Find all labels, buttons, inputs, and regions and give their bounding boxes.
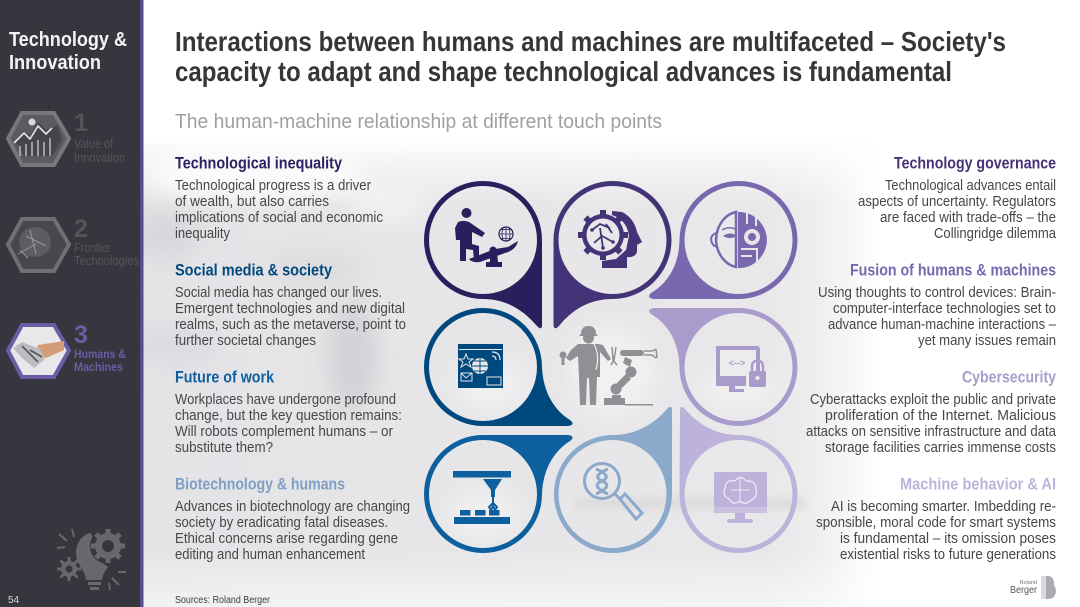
logo: Roland Berger xyxy=(1010,576,1056,599)
page number: 54 xyxy=(8,595,20,606)
icon: monitor with brain xyxy=(714,472,767,523)
text block: technology governance: are faced with trade-offs – the xyxy=(880,209,1056,226)
nav item 2: frontier technologies: Frontier xyxy=(74,240,112,255)
title: capacity to adapt and shape technological advances is fundamental xyxy=(175,56,952,87)
icon: browser window with globe xyxy=(458,344,503,388)
nav item 3: humans and machines (active) xyxy=(8,321,126,377)
text block: future of work: change, but the key question remains: xyxy=(175,407,402,424)
text block: future of work: Will robots complement humans – or xyxy=(175,423,393,440)
text block: machine behavior and AI xyxy=(816,474,1056,563)
text block: technological inequality: of wealth, but also carries xyxy=(175,193,329,210)
sidebar heading: Technology & xyxy=(9,29,127,51)
pin: machine behavior and AI xyxy=(680,407,798,553)
sidebar heading xyxy=(9,29,127,74)
pin: future of work xyxy=(424,435,573,553)
nav item 3: humans and machines (active): Humans & xyxy=(74,347,126,361)
nav item 1: value of innovation xyxy=(8,109,125,165)
text block: fusion of humans and machines: Using thoughts to control devices: Brain- xyxy=(818,284,1056,301)
text block: technological inequality: Technological progress is a driver xyxy=(175,177,371,194)
text block: cybersecurity: proliferation of the Internet. Malicious xyxy=(825,407,1056,424)
nav item 1: value of innovation: 1 xyxy=(74,109,88,137)
pin: technological inequality xyxy=(424,181,542,328)
icon: person on seesaw xyxy=(455,208,518,267)
text block: technology governance: Collingridge dilemma xyxy=(934,225,1057,242)
icon: DNA under magnifier xyxy=(584,464,642,519)
logo: Roland Berger: Berger xyxy=(1010,584,1037,596)
nav item 2: frontier technologies xyxy=(8,215,139,271)
nav item 2: frontier technologies: Technologies xyxy=(74,253,139,268)
text block: biotechnology and humans: Ethical concerns arise regarding gene xyxy=(175,530,398,547)
text block: technology governance: aspects of uncertainty. Regulators xyxy=(858,193,1056,210)
text block: machine behavior and AI: sponsible, moral code for smart systems xyxy=(816,514,1056,531)
icon: monitor with padlock xyxy=(716,346,766,392)
text block: machine behavior and AI: existential risks to future generations xyxy=(840,546,1056,563)
text block: technological inequality: implications of social and economic xyxy=(175,209,383,226)
text block: future of work: Workplaces have undergone profound xyxy=(175,391,396,408)
icon: industrial machine xyxy=(453,471,511,524)
nav item 3: humans and machines (active): 3 xyxy=(74,321,88,349)
pin: social media and society xyxy=(424,308,573,426)
icon: head with gear xyxy=(578,210,642,268)
nav item 3: humans and machines (active): Machines xyxy=(74,360,123,374)
icon: monitor with padlock: <--> xyxy=(729,358,745,368)
text block: technology governance xyxy=(858,154,1057,242)
nav item 1: value of innovation: Value of xyxy=(74,136,113,151)
pin: technology governance xyxy=(554,181,672,328)
text block: cybersecurity: Cybersecurity xyxy=(962,368,1056,386)
text block: fusion of humans and machines: computer-interface technologies set to xyxy=(833,300,1056,317)
text block: fusion of humans and machines: yet many issues remain xyxy=(918,332,1056,349)
text block: cybersecurity: storage facilities carries immense costs xyxy=(825,439,1056,456)
text block: technological inequality: inequality xyxy=(175,225,230,242)
pin: biotechnology and humans xyxy=(554,407,672,553)
text block: machine behavior and AI: AI is becoming smarter. Imbedding re- xyxy=(831,498,1056,515)
text block: social media and society xyxy=(175,260,406,349)
text block: biotechnology and humans xyxy=(175,474,410,563)
source note: Sources: Roland Berger xyxy=(175,595,271,606)
text block: biotechnology and humans: society by eradicating fatal diseases. xyxy=(175,514,388,531)
icon: lightbulb with gears xyxy=(57,528,126,590)
text block: biotechnology and humans: Biotechnology & humans xyxy=(175,474,345,494)
text block: technology governance: Technological advances entail xyxy=(885,177,1056,194)
nav item 1: value of innovation: Innovation xyxy=(74,150,125,165)
text block: future of work: Future of work xyxy=(175,368,274,386)
subtitle: The human-machine relationship at different touch points xyxy=(175,110,662,133)
text block: technological inequality xyxy=(175,154,383,242)
text block: technological inequality: Technological inequality xyxy=(175,154,342,172)
icon: half human half robot face xyxy=(711,212,767,268)
sidebar heading: Innovation xyxy=(9,52,101,74)
text block: social media and society: Social media has changed our lives. xyxy=(175,284,382,301)
logo: Roland Berger: Roland xyxy=(1020,580,1037,586)
text block: biotechnology and humans: Advances in biotechnology are changing xyxy=(175,498,410,515)
text block: fusion of humans and machines xyxy=(818,260,1057,349)
text block: future of work xyxy=(175,368,402,456)
text block: machine behavior and AI: is fundamental – its omission poses xyxy=(840,530,1056,547)
text block: future of work: substitute them? xyxy=(175,439,273,456)
pin: cybersecurity xyxy=(649,308,798,426)
text block: social media and society: Emergent technologies and new digital xyxy=(175,300,405,317)
text block: social media and society: realms, such as the metaverse, point to xyxy=(175,316,406,333)
text block: social media and society: further societal changes xyxy=(175,332,316,349)
nav item 2: frontier technologies: 2 xyxy=(74,215,88,243)
text block: social media and society: Social media & society xyxy=(175,260,332,280)
sidebar xyxy=(0,0,144,607)
text block: cybersecurity xyxy=(806,368,1057,456)
text block: biotechnology and humans: editing and human enhancement xyxy=(175,546,366,563)
central icon: worker and robot arm xyxy=(560,326,657,406)
title xyxy=(175,26,1006,87)
text block: machine behavior and AI: Machine behavior & AI xyxy=(900,474,1056,494)
pin: fusion of humans and machines xyxy=(649,181,798,299)
